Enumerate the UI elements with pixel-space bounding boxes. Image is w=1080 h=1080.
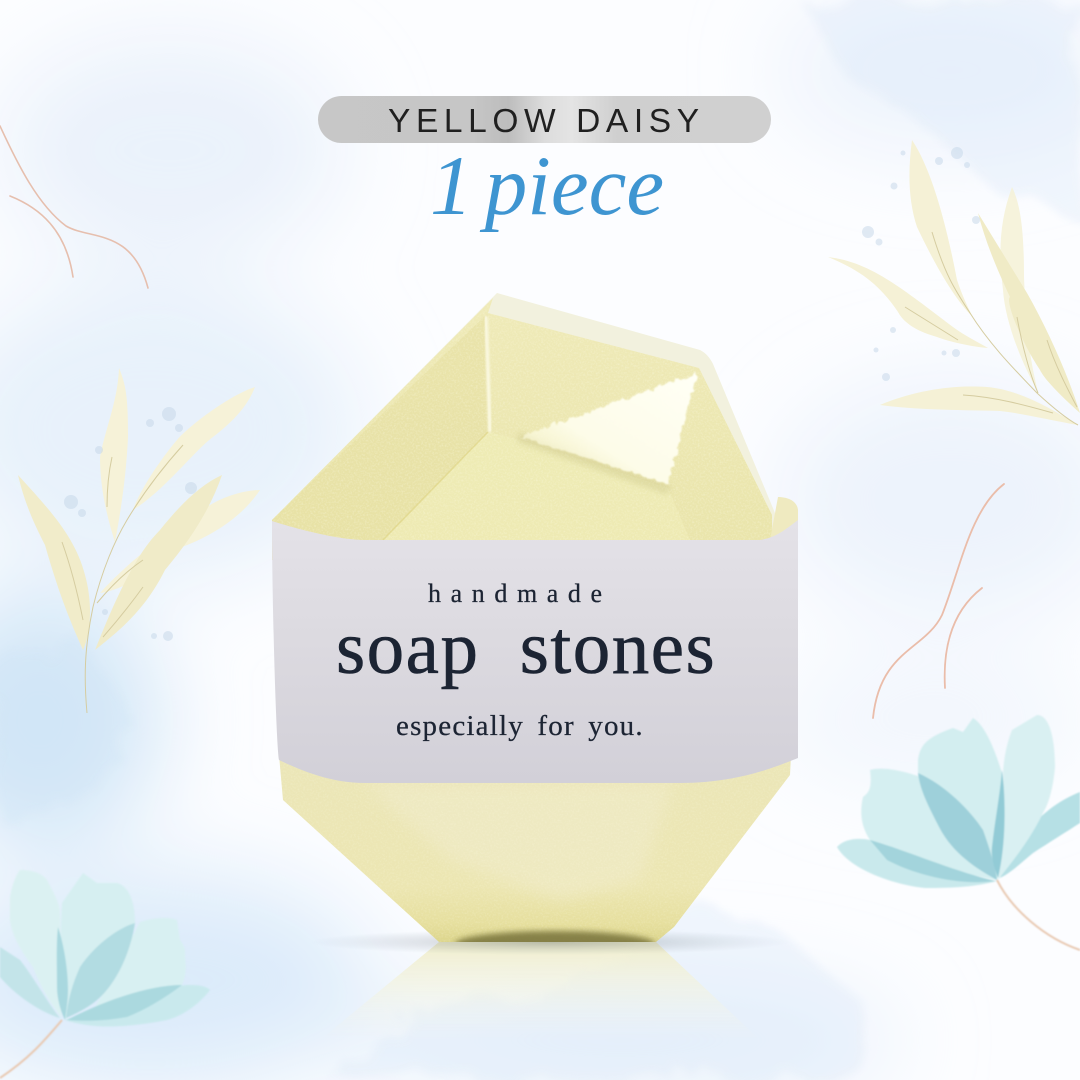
glossy edge [486, 316, 490, 432]
lower petal [65, 985, 210, 1026]
band text: handmade: handmade [428, 579, 612, 608]
paper band [272, 497, 798, 783]
left big petal [861, 769, 997, 880]
middle big petal [918, 718, 1004, 880]
soap facets [383, 432, 690, 540]
soap outer rim [272, 293, 780, 560]
title pill [318, 96, 771, 143]
flower: bottom right [837, 715, 1080, 950]
subtitle: 1 piece [430, 139, 664, 233]
lower dark petal [67, 985, 182, 1021]
band text: soap stones: soap stones [336, 607, 716, 690]
stem [0, 1020, 62, 1078]
decorative pink twig: top left [0, 126, 148, 288]
decorative pink twig: right [873, 484, 1004, 718]
far-left petal [0, 947, 60, 1018]
soap: lower half [279, 755, 791, 957]
soap grain [272, 298, 772, 560]
stem [997, 880, 1080, 950]
right big petal [998, 715, 1055, 880]
flower: bottom left [0, 870, 210, 1078]
lower dark petal [870, 840, 995, 882]
left petal [10, 870, 62, 1018]
soap: upper half [272, 293, 780, 560]
contact shadow [310, 929, 790, 955]
title text: YELLOW DAISY [388, 103, 705, 140]
far right petal [1000, 792, 1080, 878]
reflection of soap [320, 942, 760, 1040]
middle big petal [61, 873, 135, 1020]
leaf sprig: top right [828, 140, 1080, 425]
leaf sprig: left [18, 368, 260, 713]
soap yellow body [272, 298, 772, 560]
facet shadow [518, 437, 669, 490]
band text: especially for you: especially for you. [396, 710, 644, 742]
lower left petal [837, 839, 997, 888]
right big petal [93, 918, 186, 1010]
dark petal [66, 923, 135, 1018]
dark overlap petal [918, 773, 997, 880]
center sliver [57, 927, 68, 1020]
glossy highlight [520, 373, 697, 484]
center sliver [992, 770, 1005, 878]
